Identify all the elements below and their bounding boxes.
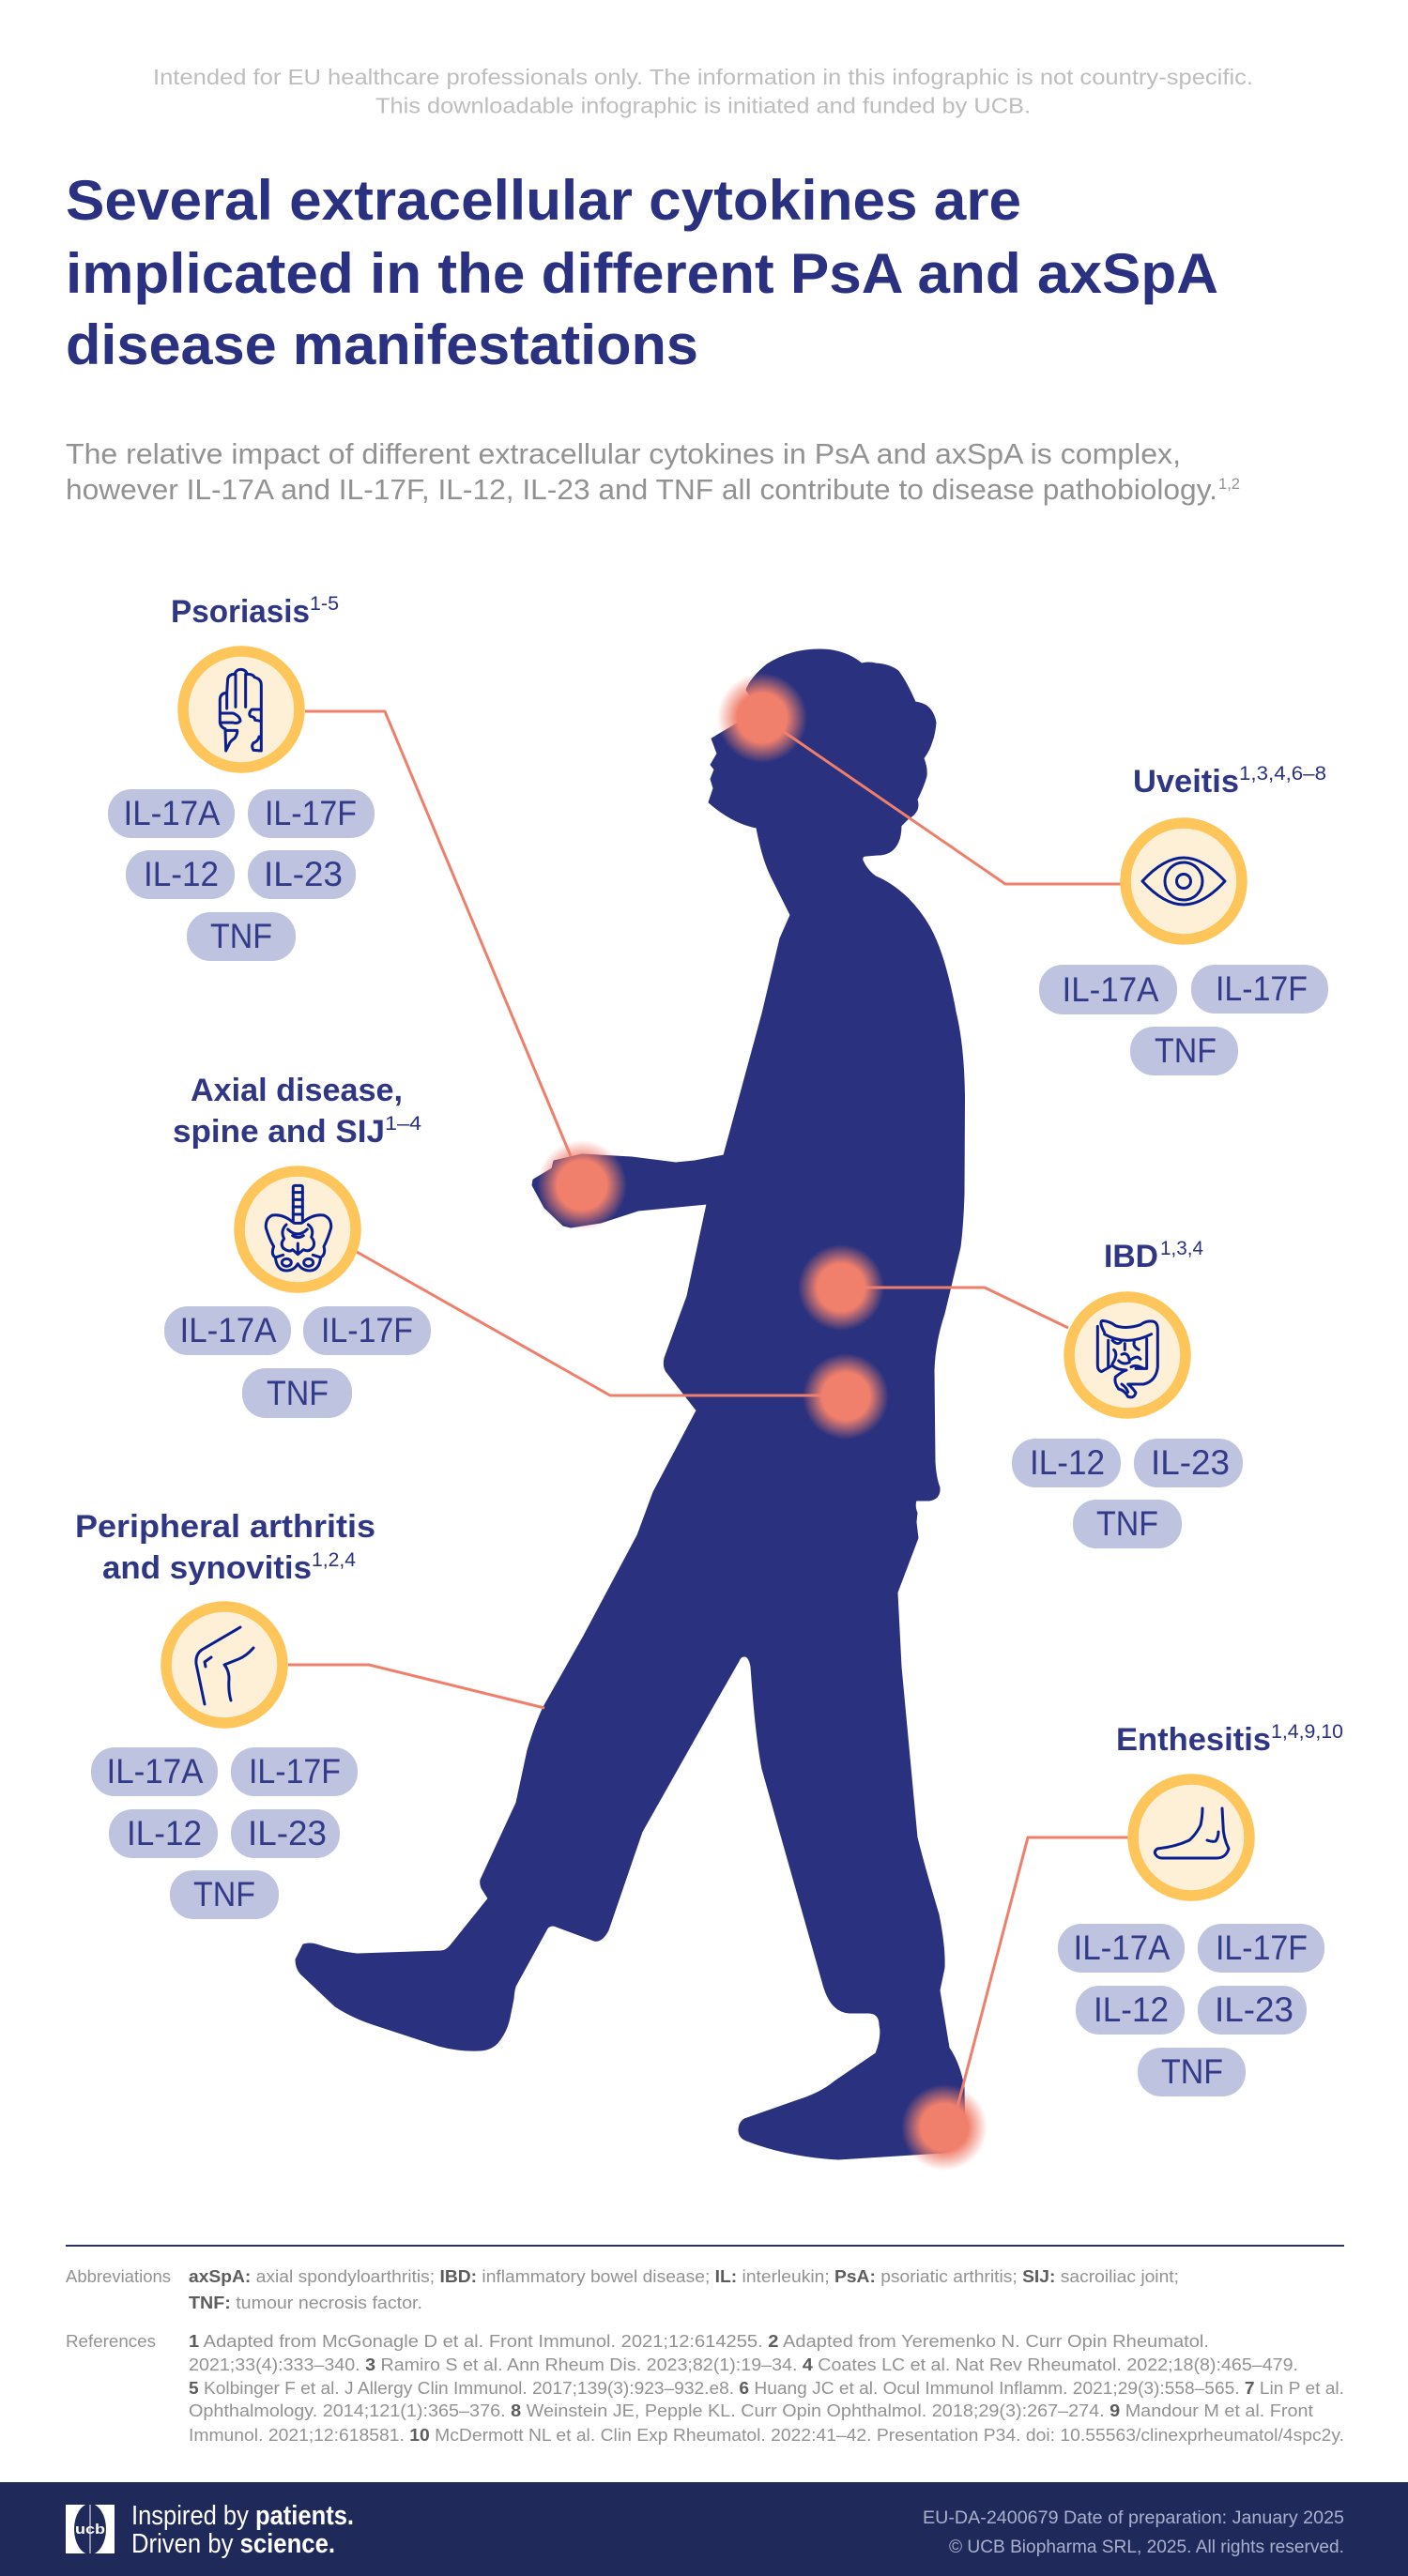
abbreviations: axSpA: axial spondyloarthritis; IBD: inflammatory bowel disease; IL: interleukin; PsA: psoriatic arthritis; SIJ: sacroiliac joint; <box>189 2266 1179 2286</box>
heading: axial disease: spine and SIJ <box>173 1114 385 1150</box>
pill: TNF <box>1130 1027 1238 1075</box>
UCB logo <box>66 2504 115 2554</box>
references: Ophthalmology. 2014;121(1):365–376. 8 Weinstein JE, Pepple KL. Curr Opin Ophthalmol. 2018;29(3):267–274. 9 Mandour M et al. Front <box>189 2401 1313 2420</box>
subtitle: 1,2 <box>1218 475 1240 493</box>
walking person silhouette <box>296 649 965 2159</box>
title: disease manifestations <box>66 313 698 376</box>
references: 5 Kolbinger F et al. J Allergy Clin Immunol. 2017;139(3):923–932.e8. 6 Huang JC et al. Ocul Immunol Inflamm. 2021;29(3):558–565. 7 Lin P et al. <box>189 2378 1344 2398</box>
icon: spine and pelvis <box>239 1171 356 1288</box>
icon: eye <box>1125 823 1242 939</box>
pill: IL-17F: IL-17F <box>265 794 357 832</box>
pill: IL-23 <box>1198 1986 1307 2035</box>
pill: IL-17F: IL-17F <box>1216 1928 1308 1967</box>
pill: IL-23 <box>1134 1439 1243 1487</box>
tagline: Driven by science. <box>131 2529 335 2559</box>
heading: uveitis <box>1133 763 1326 800</box>
heading: enthesitis: Enthesitis <box>1116 1722 1271 1758</box>
glow: heel <box>901 2084 987 2171</box>
pill: IL-23: IL-23 <box>1151 1443 1230 1482</box>
tagline: Inspired by patients. <box>131 2501 354 2531</box>
glow: wrist <box>537 1140 627 1230</box>
connector: axial disease to pelvis <box>357 1252 825 1395</box>
pill: IL-12: IL-12 <box>144 855 219 893</box>
panel: IBD <box>1012 1238 1243 1548</box>
panel: axial disease <box>164 1073 431 1418</box>
glow: pelvis <box>803 1353 889 1440</box>
heading: IBD: IBD <box>1104 1239 1158 1274</box>
pill: IL-17A: IL-17A <box>1074 1928 1171 1967</box>
pill: IL-17A: IL-17A <box>180 1311 277 1349</box>
icon: knee <box>166 1607 283 1723</box>
heading: peripheral arthritis: Peripheral arthritis <box>75 1509 375 1545</box>
references: 2021;33(4):333–340. 3 Ramiro S et al. Ann Rheum Dis. 2023;82(1):19–34. 4 Coates LC et al. Nat Rev Rheumatol. 2022;18(8):465–479. <box>189 2355 1298 2374</box>
panel: peripheral arthritis <box>75 1509 375 1919</box>
connector: peripheral arthritis to knee <box>288 1665 544 1708</box>
heading: uveitis: 1,3,4,6–8 <box>1239 763 1326 785</box>
pill: TNF <box>1073 1500 1182 1548</box>
pill: IL-12: IL-12 <box>1030 1443 1105 1482</box>
references: Immunol. 2021;12:618581. 10 McDermott NL et al. Clin Exp Rheumatol. 2022:41–42. Presentation P34. doi: 10.55563/clinexprheumatol/4spc2y. <box>189 2425 1344 2445</box>
heading: axial disease: 1–4 <box>385 1113 421 1135</box>
icon: intestines <box>1069 1297 1186 1413</box>
tagline <box>131 2501 354 2559</box>
heading: peripheral arthritis: and synovitis <box>102 1550 312 1586</box>
document code and copyright: © UCB Biopharma SRL, 2025. All rights reserved. <box>949 2537 1344 2557</box>
heading: psoriasis: Psoriasis <box>171 594 310 630</box>
pill: TNF: TNF <box>1161 2052 1223 2091</box>
document code and copyright: EU-DA-2400679 Date of preparation: January 2025 <box>923 2507 1344 2528</box>
pill: IL-12: IL-12 <box>1094 1990 1169 2029</box>
panel: enthesitis <box>1058 1721 1343 2096</box>
heading: uveitis: Uveitis <box>1133 764 1239 800</box>
heading: enthesitis <box>1116 1721 1343 1758</box>
pill: IL-17A: IL-17A <box>124 794 221 832</box>
connector: IBD to abdomen <box>861 1288 1068 1328</box>
pill: TNF: TNF <box>210 917 272 955</box>
pill: IL-12 <box>1012 1439 1121 1487</box>
pill: IL-23: IL-23 <box>264 855 343 893</box>
heading: axial disease: Axial disease, <box>191 1073 403 1108</box>
pill: TNF <box>1138 2048 1246 2096</box>
panel: psoriasis <box>108 593 375 961</box>
document code and copyright <box>923 2507 1344 2557</box>
title: implicated in the different PsA and axSpA <box>66 242 1218 305</box>
heading: axial disease <box>173 1073 421 1150</box>
pill: IL-17F <box>303 1306 431 1355</box>
connector: uveitis to eye <box>783 731 1122 884</box>
pill: IL-12 <box>109 1809 218 1858</box>
pill: IL-23 <box>231 1809 340 1858</box>
references: 1 Adapted from McGonagle D et al. Front Immunol. 2021;12:614255. 2 Adapted from Yeremenko N. Curr Opin Rheumatol. <box>189 2331 1209 2351</box>
title: Several extracellular cytokines are <box>66 169 1021 232</box>
disclaimer: This downloadable infographic is initiated and funded by UCB. <box>375 94 1031 118</box>
pill: IL-23 <box>248 850 356 899</box>
heading: IBD: 1,3,4 <box>1160 1238 1203 1259</box>
pill: IL-17A <box>1058 1924 1185 1973</box>
icon: hand with plaques <box>183 651 299 768</box>
heading: psoriasis: 1-5 <box>310 593 339 615</box>
pill: IL-17A: IL-17A <box>107 1752 204 1791</box>
subtitle <box>66 437 1240 506</box>
pill: IL-12: IL-12 <box>127 1814 202 1852</box>
glow: abdomen <box>798 1244 884 1331</box>
pill: TNF <box>170 1870 279 1919</box>
pill: IL-17F: IL-17F <box>321 1311 413 1349</box>
glow: eye <box>717 673 807 763</box>
heading: peripheral arthritis: 1,2,4 <box>312 1549 356 1571</box>
pill: IL-12 <box>126 850 235 899</box>
pill: TNF <box>242 1368 352 1418</box>
pill: IL-17F: IL-17F <box>249 1752 341 1791</box>
footer band <box>0 2482 1408 2576</box>
pill: IL-17F: IL-17F <box>1216 969 1308 1008</box>
abbreviations <box>66 2266 1179 2312</box>
heading: peripheral arthritis <box>75 1509 375 1586</box>
pill: IL-23: IL-23 <box>248 1814 327 1852</box>
connector: enthesitis to heel <box>957 1837 1128 2107</box>
subtitle: The relative impact of different extracellular cytokines in PsA and axSpA is complex, <box>66 437 1181 470</box>
pill: IL-17F <box>231 1747 358 1796</box>
title <box>66 169 1218 376</box>
disclaimer <box>153 65 1253 118</box>
UCB logo: ucb <box>75 2522 105 2538</box>
pill: TNF: TNF <box>1155 1031 1217 1070</box>
heading: IBD <box>1104 1238 1203 1274</box>
pill: TNF: TNF <box>193 1875 255 1913</box>
abbreviations: Abbreviations <box>66 2266 171 2286</box>
pill: IL-17A <box>108 789 235 838</box>
pill: IL-17A <box>91 1747 218 1796</box>
pill: TNF <box>187 912 296 961</box>
icon: foot <box>1133 1779 1249 1896</box>
pill: IL-17F <box>1191 965 1328 1014</box>
references: References <box>66 2331 156 2351</box>
pill: TNF: TNF <box>1096 1504 1158 1543</box>
heading: enthesitis: 1,4,9,10 <box>1271 1721 1343 1743</box>
pill: IL-17F <box>1198 1924 1324 1973</box>
disclaimer: Intended for EU healthcare professionals only. The information in this infographic is not country-specific. <box>153 65 1253 89</box>
pill: IL-12 <box>1076 1986 1185 2035</box>
abbreviations: TNF: tumour necrosis factor. <box>189 2293 422 2312</box>
connector: psoriasis to wrist <box>305 711 571 1156</box>
references <box>66 2331 1344 2445</box>
pill: TNF: TNF <box>267 1374 329 1412</box>
pill: IL-17A: IL-17A <box>1063 970 1159 1009</box>
pill: IL-17A <box>1039 965 1177 1014</box>
subtitle: however IL-17A and IL-17F, IL-12, IL-23 and TNF all contribute to disease pathobiology. <box>66 473 1217 506</box>
pill: IL-17A <box>164 1306 291 1355</box>
panel: uveitis <box>1039 763 1328 1075</box>
pill: IL-17F <box>248 789 375 838</box>
pill: IL-23: IL-23 <box>1215 1990 1293 2029</box>
